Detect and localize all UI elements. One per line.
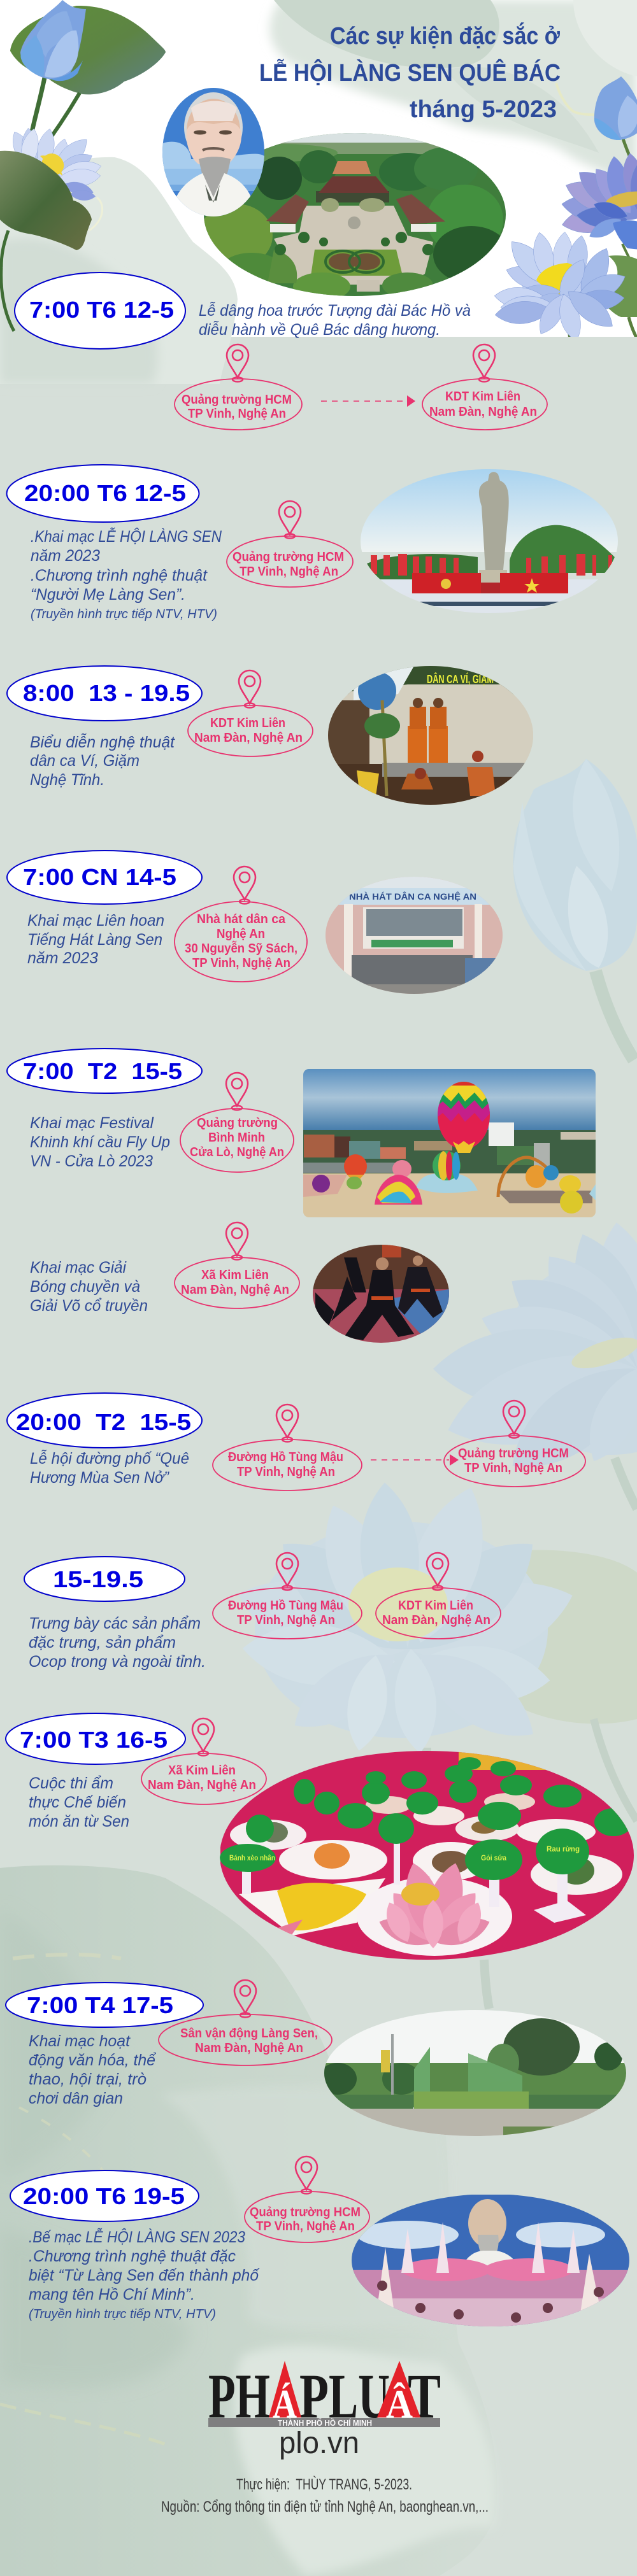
location: KDT Kim Lien: KDT Kim Liên: [398, 1599, 473, 1613]
location: Quảng trường HCM: [250, 2205, 361, 2219]
description: [29, 2032, 156, 2107]
description: Nghệ Tĩnh.: [30, 771, 104, 789]
description: biệt “Từ Làng Sen đến thành phố: [29, 2267, 260, 2284]
description: .Khai mạc LỄ HỘI LÀNG SEN: [31, 527, 222, 546]
photo: folk song performance: DÂN CA VÍ, GIẶM: [427, 672, 494, 686]
time label: 7:00 T6 12-5: [29, 297, 174, 323]
location: TP Vinh, Nghệ An: [256, 2219, 355, 2233]
event 10: 20:00 T6 19-5: [10, 2156, 630, 2328]
location: [141, 1718, 266, 1804]
time label: 15-19.5: [53, 1566, 143, 1592]
time label: 8:00 13 - 19.5: [23, 680, 190, 706]
logo: Phap Luat: PH: [208, 2361, 270, 2431]
photo: statue at HCM square: [361, 469, 618, 614]
time label: 7:00 CN 14-5: [23, 864, 176, 890]
description: Khai mạc Festival: [30, 1114, 154, 1132]
description: Giải Võ cổ truyền: [30, 1297, 148, 1315]
icon: leaf right: [609, 255, 637, 317]
description: đặc trưng, sản phẩm: [29, 1634, 176, 1652]
location: Duong Ho Tung Mau: [213, 1553, 362, 1639]
description: Tiếng Hát Làng Sen: [27, 931, 162, 949]
portrait: Ho Chi Minh: [162, 88, 264, 216]
description: [199, 301, 471, 339]
top left lotus and leaves: [0, 0, 166, 331]
location: Nam Đàn, Nghệ An: [195, 2041, 303, 2055]
location: Cửa Lò, Nghệ An: [190, 1145, 284, 1159]
icon: dark green leaf: [0, 151, 92, 250]
photo: lotus dishes: Gỏi sứa: [481, 1853, 506, 1862]
time label: [7, 666, 202, 721]
time label: 7:00 T3 16-5: [20, 1727, 168, 1753]
location: Xã Kim Liên: [168, 1764, 236, 1778]
icon: green lotus leaf: [10, 6, 166, 94]
description: Trưng bày các sản phẩm: [29, 1615, 201, 1632]
description: món ăn từ Sen: [29, 1813, 129, 1830]
photo: Lang Sen stadium: [318, 2010, 626, 2137]
time label: [7, 1049, 202, 1093]
photo: folk theatre: [326, 877, 503, 994]
location: Quang truong HCM: TP Vinh, Nghệ An: [464, 1461, 562, 1475]
description: .Chương trình nghệ thuật đặc: [29, 2247, 236, 2265]
description: (Truyền hình trực tiếp NTV, HTV): [29, 2307, 216, 2321]
location: Nam Đàn, Nghệ An: [194, 731, 303, 745]
credits: Nguồn: Cổng thông tin điện tử tỉnh Nghệ An, baonghean.vn,...: [161, 2498, 489, 2516]
time label: 7:00 T2 15-5: [23, 1058, 182, 1084]
title: tháng 5-2023: [410, 96, 557, 123]
event 2: 20:00 T6 12-5: [6, 465, 618, 621]
photo: folk song performance: [328, 666, 534, 805]
location: [188, 670, 313, 756]
description: “Người Mẹ Làng Sen”.: [31, 586, 185, 604]
icon: stems: [1, 78, 80, 331]
location: Bình Minh: [208, 1131, 265, 1145]
description: [29, 1615, 206, 1671]
location: Duong Ho Tung Mau: TP Vinh, Nghệ An: [237, 1465, 335, 1479]
location: KDT Kim Liên: [210, 716, 285, 730]
location: Quang truong HCM: TP Vinh, Nghệ An: [188, 407, 286, 421]
description: Khinh khí cầu Fly Up: [30, 1133, 170, 1151]
description: Lễ dâng hoa trước Tượng đài Bác Hồ và: [199, 301, 471, 320]
description: động văn hóa, thể: [29, 2051, 156, 2069]
location: KDT Kim Lien: Nam Đàn, Nghệ An: [429, 405, 537, 419]
icon: light blue flower: [8, 127, 103, 201]
logo: Phap Luat: Ậ: [386, 2381, 413, 2426]
location: Nhà hát dân ca: [197, 912, 286, 926]
location: Duong Ho Tung Mau: Đường Hồ Tùng Mậu: [228, 1599, 343, 1613]
logo: Phap Luat: T: [408, 2361, 441, 2431]
description: [30, 1449, 189, 1487]
location: [227, 501, 353, 587]
description: Hương Mùa Sen Nở”: [30, 1469, 170, 1487]
description: chơi dân gian: [29, 2090, 123, 2107]
time label: 20:00 T2 15-5: [16, 1409, 191, 1435]
location: Quảng trường HCM: [233, 550, 344, 564]
location: 30 Nguyễn Sỹ Sách,: [185, 940, 297, 956]
location: [245, 2156, 369, 2242]
time label: [6, 1713, 185, 1764]
description: năm 2023: [31, 547, 100, 565]
event 8: 7:00 T3 16-5: [6, 1713, 634, 1961]
location: Xã Kim Liên: [201, 1268, 269, 1282]
description: Lễ hội đường phố “Quê: [30, 1449, 189, 1468]
time label: [24, 1557, 185, 1601]
description: thao, hội trại, trò: [29, 2070, 147, 2088]
description: VN - Cửa Lò 2023: [30, 1152, 153, 1170]
photo: lotus dishes: [220, 1751, 634, 1961]
logo: Phap Luat: LU: [329, 2361, 390, 2431]
location: [175, 867, 307, 982]
logo: Phap Luat: THÀNH PHỐ HỒ CHÍ MINH: [278, 2418, 372, 2428]
description: (Truyền hình trực tiếp NTV, HTV): [31, 607, 217, 621]
description: .Chương trình nghệ thuật: [31, 567, 208, 584]
arrow: [371, 1454, 459, 1466]
description: Khai mạc Giải: [30, 1259, 127, 1277]
description: [29, 2227, 260, 2321]
icon: blue bud right: [594, 76, 637, 140]
location: Quảng trường: [197, 1116, 278, 1130]
description: Khai mạc Liên hoan: [27, 912, 164, 930]
location: [175, 1222, 299, 1308]
photo: hot air balloons: [299, 1069, 596, 1218]
description: Cuộc thi ẩm: [29, 1774, 113, 1792]
event 3: 8:00 13-19.5: [7, 666, 534, 805]
description: [30, 1259, 148, 1315]
location: KDT Kim Lien: [376, 1553, 501, 1639]
time label: [7, 1393, 202, 1448]
title: [259, 22, 561, 123]
event 7: 15-19.5: [24, 1553, 501, 1671]
event 1: 7:00 T6 12-5: [15, 272, 547, 430]
time label: 7:00 T4 17-5: [27, 1992, 173, 2018]
location: Quang truong HCM: [444, 1401, 585, 1487]
description: [29, 1774, 129, 1830]
faded leaf and lotus centre: [227, 1478, 637, 2009]
location: Quang truong HCM: [175, 344, 302, 430]
icon: pale blue flower: [494, 232, 626, 337]
photo: lotus dishes: Bánh xèo nhân: [229, 1853, 275, 1862]
description: [27, 912, 164, 967]
location: Duong Ho Tung Mau: [213, 1405, 362, 1490]
description: Bóng chuyền và: [30, 1278, 140, 1296]
description: [30, 733, 175, 789]
location: [180, 1073, 294, 1172]
location: KDT Kim Lien: [422, 344, 547, 430]
description: diễu hành về Quê Bác dâng hương.: [199, 320, 440, 339]
photo: stage performance: [352, 2195, 630, 2328]
location: Duong Ho Tung Mau: TP Vinh, Nghệ An: [237, 1613, 335, 1627]
arrow: [321, 395, 415, 407]
description: năm 2023: [27, 949, 98, 967]
event 4: 7:00 CN 14-5: [7, 851, 503, 994]
location: Sân vận động Làng Sen,: [180, 2027, 318, 2041]
description: dân ca Ví, Giặm: [30, 752, 140, 770]
description: thực Chế biến: [29, 1794, 126, 1811]
photo: folk theatre: NHÀ HÁT DÂN CA NGHỆ AN: [349, 891, 476, 902]
logo: Phap Luat: Á: [273, 2381, 297, 2426]
time label: [6, 1983, 203, 2027]
description: Khai mạc hoạt: [29, 2032, 131, 2050]
photo: Kim Lien memorial aerial view: [199, 131, 510, 301]
location: KDT Kim Lien: Nam Đàn, Nghệ An: [382, 1613, 490, 1627]
location: TP Vinh, Nghệ An: [192, 956, 290, 970]
photo: martial arts: [313, 1245, 449, 1347]
event 5: 7:00 T2 15-5: [7, 1049, 596, 1218]
event 6: 20:00 T2 15-5: [7, 1393, 585, 1490]
event 5b: volleyball and martial arts: [30, 1222, 449, 1347]
faded lotus bud: [513, 759, 637, 1060]
icon: blue lotus bud: [20, 0, 86, 81]
location: Nam Đàn, Nghệ An: [148, 1778, 256, 1792]
time label: [6, 465, 199, 522]
website: plo.vn: [279, 2426, 359, 2460]
location: Nghệ An: [217, 927, 265, 941]
time label: 20:00 T6 12-5: [24, 480, 186, 506]
event 9: 7:00 T4 17-5: [6, 1980, 626, 2137]
icon: stems right: [569, 137, 637, 337]
icon: deep blue flower right: [560, 152, 637, 250]
description: [31, 527, 222, 621]
time label: [15, 272, 185, 349]
description: Biểu diễn nghệ thuật: [30, 733, 175, 751]
location: Quang truong HCM: Quảng trường HCM: [458, 1447, 569, 1461]
credits: Thực hiện: THÙY TRANG, 5-2023.: [236, 2476, 412, 2493]
location: KDT Kim Lien: KDT Kim Liên: [445, 390, 520, 404]
logo: Phap Luat: [208, 2361, 441, 2431]
logo: Phap Luat: P: [299, 2361, 329, 2431]
description: Ocop trong và ngoài tỉnh.: [29, 1653, 206, 1671]
photo: lotus dishes: Rau rừng: [547, 1844, 580, 1853]
title: LỄ HỘI LÀNG SEN QUÊ BÁC: [259, 58, 561, 87]
description: .Bế mạc LỄ HỘI LÀNG SEN 2023: [29, 2227, 245, 2246]
credits: [161, 2476, 489, 2516]
location: Quang truong HCM: Quảng trường HCM: [182, 393, 292, 407]
title: Các sự kiện đặc sắc ở: [330, 22, 561, 50]
time label: 20:00 T6 19-5: [23, 2183, 185, 2209]
location: [159, 1980, 332, 2065]
description: [30, 1114, 170, 1170]
location: Duong Ho Tung Mau: Đường Hồ Tùng Mậu: [228, 1450, 343, 1464]
time label: [7, 851, 202, 904]
time label: [10, 2170, 199, 2221]
location: TP Vinh, Nghệ An: [240, 565, 338, 579]
location: Nam Đàn, Nghệ An: [181, 1283, 289, 1297]
faded lotus flower right: [433, 1219, 637, 1509]
description: mang tên Hồ Chí Minh”.: [29, 2286, 195, 2304]
top right lotus flowers: [494, 76, 637, 343]
